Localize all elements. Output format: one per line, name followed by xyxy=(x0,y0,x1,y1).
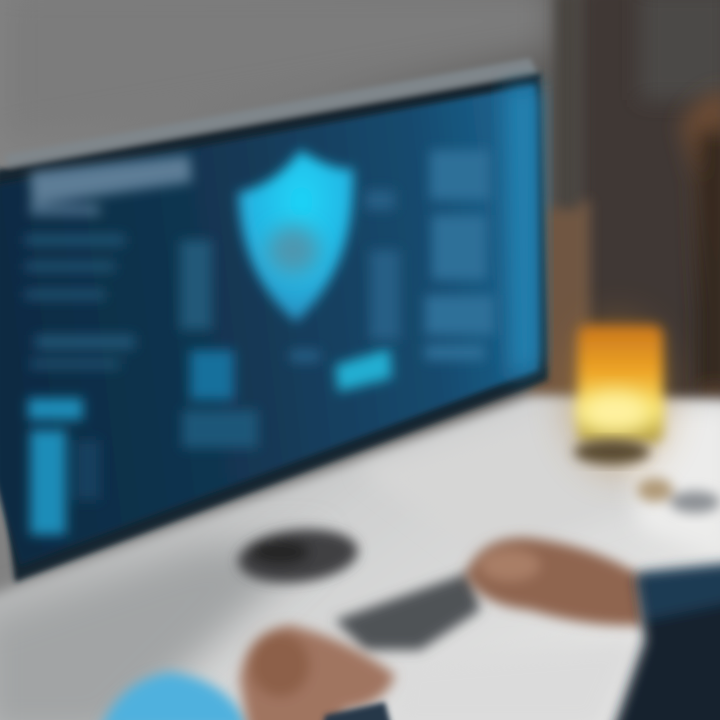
glowing lamp xyxy=(563,315,673,475)
cyan badge xyxy=(335,348,392,392)
left cyan bar chart xyxy=(28,398,100,535)
keyboard xyxy=(335,572,480,650)
dashboard header block xyxy=(30,155,192,215)
blue mouse pad xyxy=(100,672,250,720)
mouse xyxy=(236,524,360,588)
left text column xyxy=(25,235,135,368)
desk surface xyxy=(0,395,720,720)
right hand xyxy=(465,538,645,625)
person hair at right edge xyxy=(680,90,720,400)
monitor screen: security dashboard xyxy=(0,85,540,565)
monitor bezel xyxy=(0,58,548,582)
shield icon xyxy=(238,150,353,322)
left hand xyxy=(240,625,395,720)
wooden panel behind monitor xyxy=(530,0,590,405)
left sleeve xyxy=(320,702,395,720)
small center labels xyxy=(290,190,400,362)
right text columns xyxy=(425,150,495,360)
middle column xyxy=(180,240,258,448)
small objects on desk xyxy=(637,478,720,513)
right sleeve xyxy=(610,562,720,720)
